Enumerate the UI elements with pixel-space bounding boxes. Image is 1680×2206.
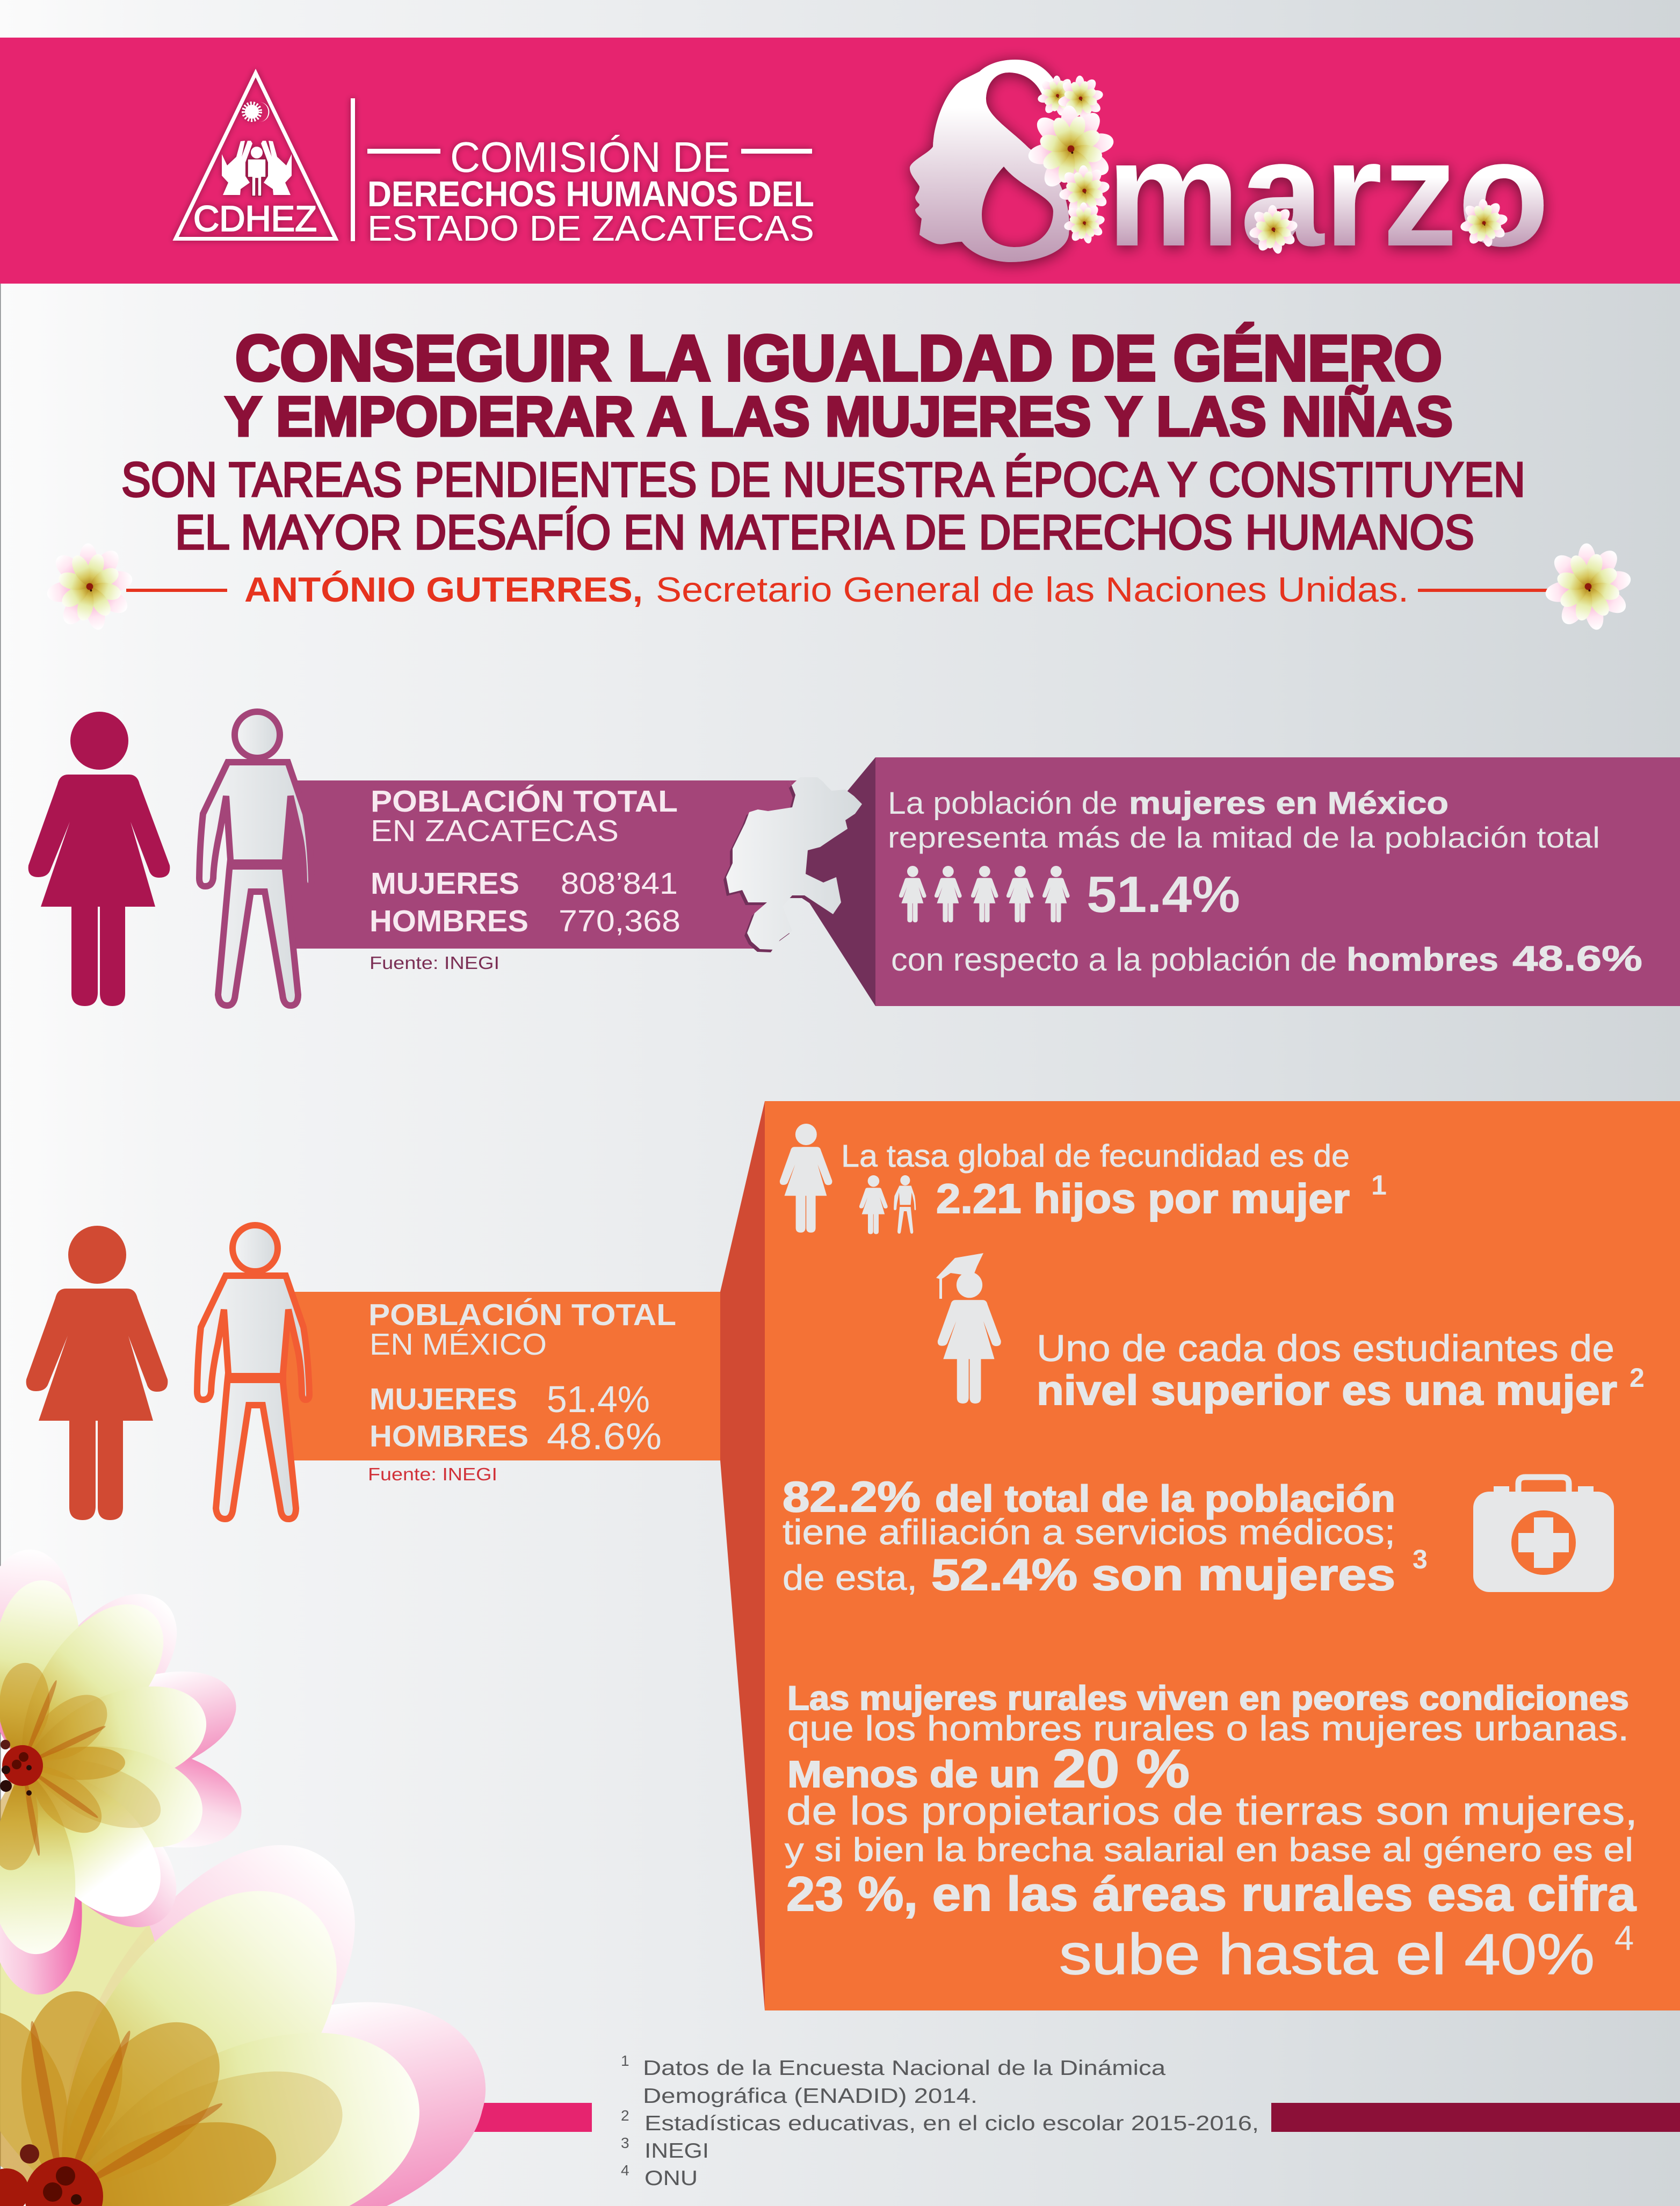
fact: rural women: [785, 1680, 1638, 1986]
quote attribution: ANTÓNIO GUTERRES,: [244, 570, 643, 609]
band text: EN MÉXICO: [370, 1327, 547, 1362]
footnotes: Datos de la Encuesta Nacional de la Dinámica: [643, 2057, 1165, 2080]
band text: 770,368: [559, 904, 680, 938]
fact: rural women: Las mujeres rurales viven en peores condiciones: [787, 1680, 1629, 1717]
fact: health coverage: 3: [1413, 1544, 1428, 1574]
fold: [795, 757, 875, 1006]
fact: rural women: Menos de un: [787, 1753, 1040, 1795]
fact: health coverage: tiene afiliación a servicios médicos;: [783, 1512, 1395, 1552]
fold: [720, 1101, 765, 2010]
fact: health coverage: [783, 1473, 1428, 1600]
icon: woman: [26, 1226, 168, 1520]
fact: fertility: 1: [1371, 1170, 1387, 1201]
footnotes: ONU: [645, 2167, 698, 2190]
icon: man: [197, 1225, 309, 1519]
footnotes: Estadísticas educativas, en el ciclo escolar 2015-2016,: [645, 2112, 1259, 2135]
icon: man: [199, 712, 312, 1006]
footnotes: [621, 2052, 1259, 2190]
quote attribution: Secretario General de las Naciones Unidas.: [656, 570, 1409, 609]
icon: woman: [28, 712, 170, 1006]
band text: 808’841: [561, 866, 678, 901]
panel text: con respecto a la población de: [891, 942, 1337, 978]
band text: HOMBRES: [370, 904, 528, 938]
band text: EN ZACATECAS: [371, 814, 619, 848]
fact: students: nivel superior es una mujer: [1037, 1366, 1617, 1414]
footnotes: INEGI: [645, 2139, 709, 2162]
title: CONSEGUIR LA IGUALDAD DE GÉNERO: [235, 322, 1442, 394]
footnotes: 2: [621, 2107, 629, 2124]
footnotes: Demográfica (ENADID) 2014.: [643, 2085, 977, 2108]
fact: rural women: que los hombres rurales o las mujeres urbanas.: [787, 1709, 1629, 1748]
band text: MUJERES: [371, 866, 519, 901]
panel: facts about women: [720, 1101, 1680, 2010]
logo: 8 marzo with face: marzo: [1106, 109, 1549, 278]
source: Fuente: INEGI: [368, 1464, 497, 1484]
band: [282, 780, 806, 949]
band: [279, 1292, 725, 1460]
fact: rural women: de los propietarios de tierras son mujeres,: [786, 1789, 1638, 1833]
fact: rural women: sube hasta el 40%: [1059, 1922, 1595, 1986]
logo: CDHEZ triangle emblem: [176, 73, 336, 239]
fact: students: [936, 1253, 1645, 1414]
logo: 8 marzo with face: [910, 60, 1549, 278]
map of Zacatecas: [723, 777, 862, 952]
fact: fertility: [780, 1124, 1387, 1234]
fact: fertility: 2.21 hijos por mujer: [936, 1176, 1350, 1222]
band text: HOMBRES: [370, 1419, 528, 1453]
panel text: 48.6%: [1512, 938, 1642, 978]
panel text: [888, 786, 1642, 978]
icon: medical kit: [1473, 1477, 1614, 1592]
panel: women in Mexico: [723, 757, 1680, 1006]
band text: POBLACIÓN TOTAL: [371, 784, 678, 819]
quote attribution: [46, 544, 1632, 631]
title: EL MAYOR DESAFÍO EN MATERIA DE DERECHOS HUMANOS: [175, 505, 1474, 560]
band text: 48.6%: [547, 1415, 662, 1457]
panel text: La población de: [888, 786, 1118, 821]
header banner: [0, 38, 1680, 284]
logo text: Comisión de Derechos Humanos: DERECHOS HUMANOS DEL: [367, 174, 814, 214]
fact: rural women: 23 %, en las áreas rurales esa cifra: [786, 1868, 1636, 1921]
title: [121, 322, 1525, 560]
footnotes: 1: [621, 2052, 629, 2069]
panel: population of Zacatecas: [28, 712, 806, 1006]
band text: POBLACIÓN TOTAL: [368, 1298, 676, 1332]
fact: rural women: y si bien la brecha salarial en base al género es el: [785, 1832, 1633, 1869]
footer bars: [376, 2103, 1680, 2132]
source: Fuente: INEGI: [370, 953, 499, 973]
logo text: Comisión de Derechos Humanos: [351, 98, 814, 249]
panel text: mujeres en México: [1129, 786, 1449, 821]
fact: students: Uno de cada dos estudiantes de: [1037, 1327, 1614, 1369]
icons: five women: [899, 866, 1070, 922]
logo text: Comisión de Derechos Humanos: COMISIÓN DE: [450, 133, 730, 181]
fact: health coverage: del total de la población: [935, 1478, 1395, 1520]
logo text: Comisión de Derechos Humanos: ESTADO DE ZACATECAS: [367, 208, 814, 249]
panel text: 51.4%: [1087, 866, 1240, 923]
panel text: representa más de la mitad de la población total: [888, 821, 1600, 854]
fact: rural women: 4: [1614, 1918, 1634, 1957]
fact: students: 2: [1630, 1363, 1645, 1393]
logo: CDHEZ triangle emblem: CDHEZ: [193, 199, 317, 239]
title: SON TAREAS PENDIENTES DE NUESTRA ÉPOCA Y CONSTITUYEN: [121, 453, 1525, 507]
fact: fertility: La tasa global de fecundidad es de: [841, 1139, 1350, 1174]
title: Y EMPODERAR A LAS MUJERES Y LAS NIÑAS: [225, 386, 1453, 448]
band text: 51.4%: [547, 1378, 650, 1420]
band text: [368, 1298, 676, 1457]
decorative flowers bottom left: [0, 1546, 511, 2206]
fact: rural women: 20 %: [1053, 1739, 1190, 1799]
panel text: hombres: [1346, 942, 1498, 978]
footnotes: 3: [621, 2135, 629, 2151]
fact: health coverage: 52.4% son mujeres: [931, 1550, 1395, 1600]
footnotes: 4: [621, 2162, 629, 2179]
fact: health coverage: 82.2%: [783, 1473, 921, 1521]
band text: [370, 784, 680, 938]
panel: population of Mexico: [26, 1225, 725, 1520]
fact: health coverage: de esta,: [783, 1558, 917, 1597]
band text: MUJERES: [370, 1382, 517, 1416]
